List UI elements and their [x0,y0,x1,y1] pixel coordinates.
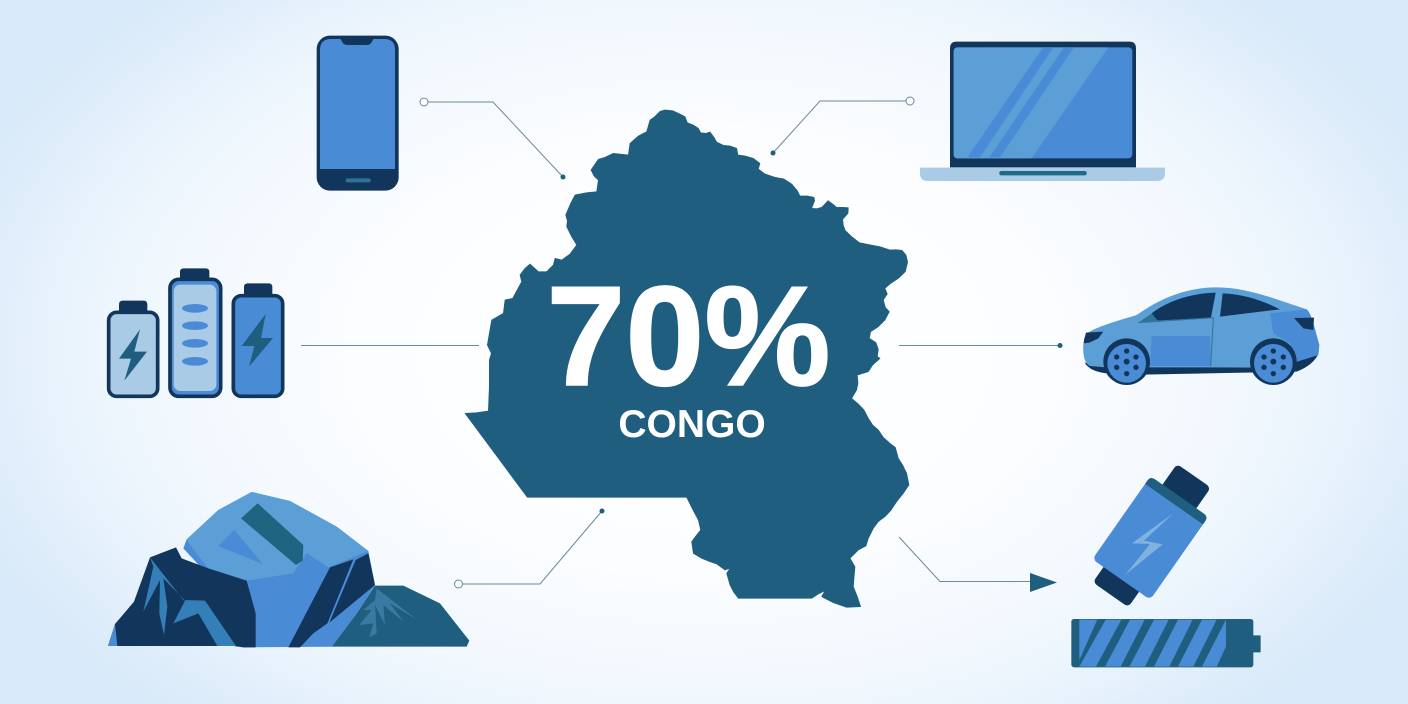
arrow: to battery cells [899,537,1057,592]
map: Congo silhouette [465,110,909,607]
battery: small pale [109,301,158,396]
rock: centre blue [183,492,375,647]
icon: horizontal striped battery [1071,619,1261,667]
connector: ore rock [454,508,604,588]
icon: car [1083,287,1319,385]
icon: three batteries [109,268,283,396]
connector: car [899,343,1062,348]
headline: 70%: 70% [546,257,831,416]
connector: laptop [770,97,914,156]
rock: left navy [108,547,256,647]
icon: laptop [920,42,1165,181]
battery: blue charged [233,283,283,396]
facet: lower blue wedge [302,585,375,647]
facet: navy band centre [288,559,353,647]
facet: navy triangle right [329,553,375,623]
battery: tall with cells [170,268,221,396]
connector: batteries [301,344,479,346]
icon: smartphone [317,36,399,191]
rock: right teal [332,586,469,647]
wheel: front [1103,338,1150,385]
wheel: rear [1250,338,1297,385]
connector: phone [420,98,566,180]
icon: tilted battery cell [1082,455,1223,615]
label: CONGO: CONGO [618,403,766,446]
icon: cobalt ore rocks [108,492,469,647]
veins: light on teal rock [359,588,417,637]
